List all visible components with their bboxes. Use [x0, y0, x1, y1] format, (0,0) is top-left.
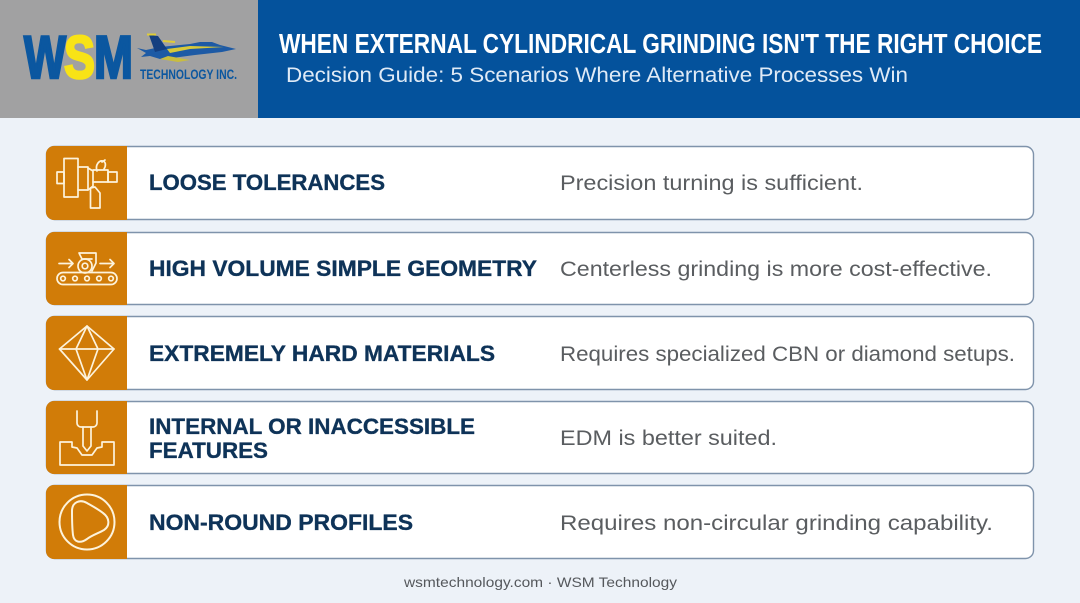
description: Requires non-circular grinding capability.	[560, 511, 993, 535]
logo: WSM wordmark: M	[94, 24, 133, 91]
icon: non-round profile	[60, 494, 114, 550]
description: Requires specialized CBN or diamond setups.	[560, 342, 1015, 366]
logo: jet icon	[137, 34, 236, 62]
description: Precision turning is sufficient.	[560, 171, 863, 195]
label: FEATURES	[149, 438, 268, 463]
icon: EDM tool in cavity	[60, 411, 114, 465]
subtitle: Decision Guide: 5 Scenarios Where Alternative Processes Win	[286, 64, 908, 87]
logo: WSM wordmark: W	[24, 24, 66, 91]
logo panel	[0, 0, 258, 118]
row 1: loose tolerances	[46, 146, 1034, 220]
row 4: internal or inaccessible features	[46, 401, 1034, 474]
logo: WSM wordmark	[24, 24, 133, 91]
description: Centerless grinding is more cost-effective.	[560, 257, 992, 281]
icon: diamond	[60, 326, 114, 380]
logo: WSM wordmark: S	[64, 24, 95, 91]
icon: centerless conveyor	[57, 253, 117, 284]
footer: wsmtechnology.com · WSM Technology	[403, 574, 677, 590]
label: LOOSE TOLERANCES	[149, 170, 385, 195]
label: EXTREMELY HARD MATERIALS	[149, 341, 495, 366]
icon: lathe turning	[57, 158, 117, 208]
label: INTERNAL OR INACCESSIBLE	[149, 414, 475, 439]
description: EDM is better suited.	[560, 426, 777, 450]
row 3: extremely hard materials	[46, 316, 1034, 390]
label: HIGH VOLUME SIMPLE GEOMETRY	[149, 256, 537, 281]
row 2: high volume simple geometry	[46, 232, 1034, 305]
logo: Technology Inc: TECHNOLOGY INC.	[140, 66, 237, 82]
label	[149, 414, 475, 463]
header banner	[258, 0, 1080, 118]
label: NON-ROUND PROFILES	[149, 510, 413, 535]
row 5: non-round profiles	[46, 485, 1034, 559]
